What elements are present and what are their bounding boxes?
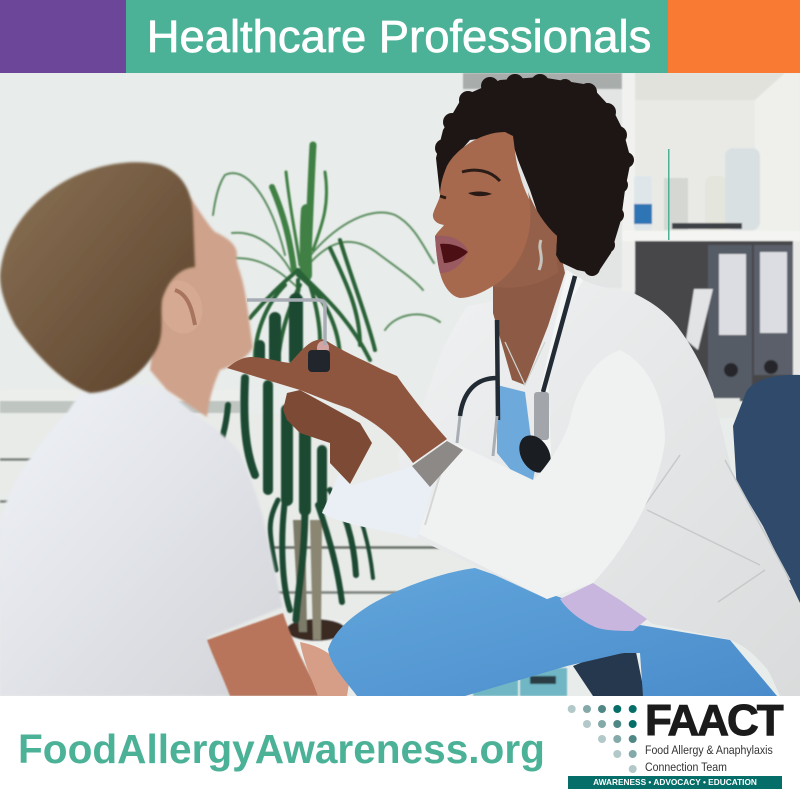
title: Healthcare Professionals xyxy=(147,11,651,62)
small sleeve xyxy=(322,442,433,539)
icon: dot triangle xyxy=(568,705,637,773)
boy hand xyxy=(300,642,350,696)
logo subtitle: Connection Team xyxy=(645,760,727,774)
FAACT logo xyxy=(568,696,784,789)
mouth xyxy=(435,236,468,273)
teal title block xyxy=(126,0,668,73)
coat lapel xyxy=(530,270,583,480)
eye xyxy=(468,191,492,196)
earring xyxy=(539,240,541,270)
sleeve cuff line xyxy=(425,475,440,525)
scrubs lower xyxy=(560,583,647,631)
boy shirt xyxy=(0,384,283,696)
watch xyxy=(412,441,463,487)
stethoscope xyxy=(460,276,575,420)
logo wordmark: FAACT xyxy=(645,696,782,745)
jaw shadow xyxy=(493,192,558,287)
boy neck and face xyxy=(150,197,253,417)
logo subtitle xyxy=(645,743,773,774)
necklace xyxy=(505,342,545,385)
middle crown leaves xyxy=(250,240,375,365)
brow xyxy=(462,170,500,181)
shelf bottles xyxy=(634,148,760,230)
throat instrument xyxy=(247,300,330,372)
boy inner ear xyxy=(175,290,195,325)
thin light upper leaves xyxy=(213,173,440,330)
orange block xyxy=(668,0,800,73)
far eye xyxy=(440,196,446,198)
plant xyxy=(213,145,440,662)
photo: doctor examining a boy's throat xyxy=(0,73,800,696)
boy xyxy=(0,162,350,696)
blue trousers xyxy=(328,568,777,696)
doctor xyxy=(227,74,800,696)
dark core leaves xyxy=(216,300,373,620)
website address: FoodAllergyAwareness.org xyxy=(18,726,545,772)
hand and forearm xyxy=(227,339,447,463)
coat pocket and seams xyxy=(645,455,790,602)
scrubs upper xyxy=(497,385,535,496)
trunks xyxy=(293,520,307,632)
storage boxes xyxy=(473,676,518,696)
shelving unit xyxy=(463,73,800,401)
doctor face xyxy=(433,132,558,298)
stethoscope metal xyxy=(457,392,557,478)
white planter xyxy=(275,618,365,662)
mouth interior xyxy=(440,244,468,263)
purple block xyxy=(0,0,126,73)
top banner xyxy=(0,0,800,73)
lower fist and wrist xyxy=(283,390,372,484)
chair xyxy=(573,375,800,696)
doctor hair xyxy=(435,74,634,276)
neck and chest xyxy=(493,250,565,385)
soil xyxy=(286,619,346,641)
thumbnail xyxy=(317,341,329,355)
logo tagline bar xyxy=(568,776,782,789)
boy hair xyxy=(0,162,195,393)
binders xyxy=(686,245,793,400)
lower cabinet xyxy=(0,390,740,696)
white coat body xyxy=(397,270,800,696)
logo tagline bar: AWARENESS • ADVOCACY • EDUCATION xyxy=(593,777,757,787)
large sleeve xyxy=(417,350,665,599)
background wall xyxy=(0,73,800,696)
logo subtitle: Food Allergy & Anaphylaxis xyxy=(645,743,773,757)
thin teal line xyxy=(668,149,670,240)
boy ear xyxy=(154,275,208,339)
boy arm xyxy=(207,613,322,696)
main upper leaves xyxy=(272,145,327,275)
